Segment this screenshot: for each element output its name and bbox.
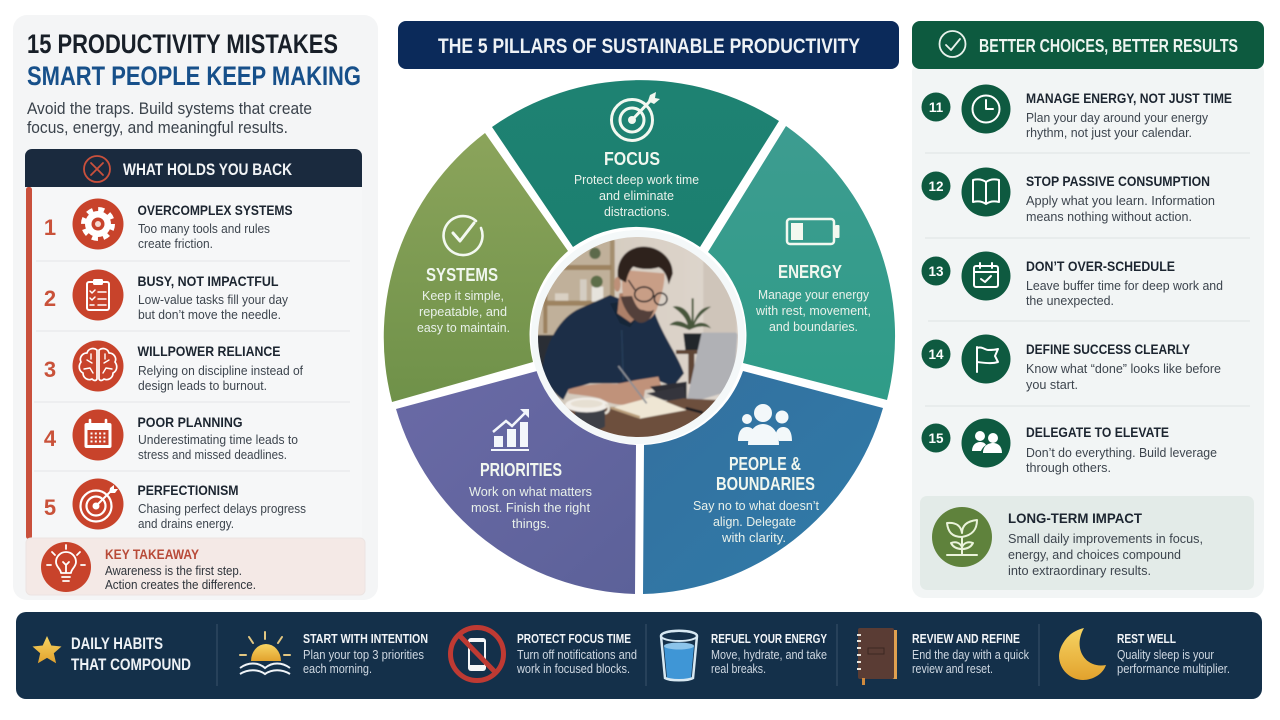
choice 15: DELEGATE TO ELEVATE bbox=[1026, 424, 1169, 440]
habit: rest well: REST WELL bbox=[1117, 632, 1176, 646]
callout: long-term impact bbox=[920, 496, 1254, 590]
choice 13 bbox=[922, 252, 1223, 308]
habit: rest well: performance multiplier. bbox=[1117, 662, 1230, 676]
segment: priorities: Work on what matters bbox=[469, 485, 592, 499]
icon: calendar bbox=[72, 410, 124, 460]
callout: key takeaway: Action creates the difference. bbox=[105, 578, 256, 592]
callout: key takeaway: Awareness is the first step. bbox=[105, 564, 242, 578]
icon: clipboard bbox=[72, 270, 124, 320]
mistake 3 bbox=[44, 340, 303, 393]
icon: flag bbox=[962, 334, 1010, 384]
badge 15 bbox=[922, 424, 950, 452]
badge 15: 15 bbox=[928, 431, 944, 446]
segment: focus: and eliminate bbox=[599, 189, 674, 203]
icon: rising bars bbox=[491, 409, 529, 451]
mistake 4: POOR PLANNING bbox=[138, 414, 243, 430]
segment: people and boundaries bbox=[643, 371, 883, 594]
subtitle: Avoid the traps. Build systems that create bbox=[27, 100, 312, 118]
icon: check circle bbox=[940, 31, 966, 57]
choice 12: means nothing without action. bbox=[1026, 210, 1192, 224]
choice 11: rhythm, not just your calendar. bbox=[1026, 126, 1192, 140]
callout: long-term impact: LONG-TERM IMPACT bbox=[1008, 510, 1142, 526]
segment: energy: Manage your energy bbox=[758, 288, 870, 302]
segment: energy: ENERGY bbox=[778, 262, 842, 282]
segment: focus bbox=[492, 80, 779, 247]
subtitle bbox=[27, 100, 312, 137]
segment: energy: and boundaries. bbox=[769, 320, 858, 334]
mistake 2: 2 bbox=[44, 286, 56, 311]
choice 13: Leave buffer time for deep work and bbox=[1026, 279, 1223, 293]
choice 13: DON’T OVER-SCHEDULE bbox=[1026, 258, 1175, 274]
segment: priorities: PRIORITIES bbox=[480, 460, 562, 480]
mistake 2: Low-value tasks fill your day bbox=[138, 293, 289, 307]
header: what holds you back: WHAT HOLDS YOU BACK bbox=[123, 160, 293, 179]
icon: glass of water bbox=[661, 631, 697, 680]
mistake 4: stress and missed deadlines. bbox=[138, 448, 287, 462]
icon: sunrise bbox=[240, 632, 290, 674]
segment: focus: Protect deep work time bbox=[574, 173, 699, 187]
choice 11 bbox=[922, 84, 1232, 140]
mistake 5 bbox=[44, 478, 306, 531]
list background bbox=[26, 187, 362, 539]
mistake 1: 1 bbox=[44, 215, 56, 240]
mistake 1 bbox=[44, 198, 292, 251]
habits heading: THAT COMPOUND bbox=[71, 656, 191, 674]
choice 15: Don’t do everything. Build leverage bbox=[1026, 446, 1217, 460]
icon: star bbox=[32, 636, 62, 663]
callout: key takeaway: KEY TAKEAWAY bbox=[105, 546, 200, 562]
icon: two people bbox=[962, 418, 1010, 468]
banner: better choices bbox=[912, 21, 1264, 69]
habit: protect focus time: work in focused blocks. bbox=[516, 662, 630, 676]
banner: center heading bbox=[398, 21, 899, 69]
icon: calendar check bbox=[962, 252, 1010, 300]
icon: gear bbox=[72, 198, 124, 250]
habit: refuel your energy: real breaks. bbox=[711, 662, 766, 676]
habit: refuel your energy: REFUEL YOUR ENERGY bbox=[711, 632, 828, 646]
habit: rest well bbox=[1059, 628, 1230, 680]
mistake 1: create friction. bbox=[138, 237, 213, 251]
choice 12 bbox=[922, 168, 1215, 224]
mistake 3: design leads to burnout. bbox=[138, 379, 267, 393]
mistake 4 bbox=[44, 410, 298, 462]
mistake 3: WILLPOWER RELIANCE bbox=[138, 343, 280, 359]
choice 12: STOP PASSIVE CONSUMPTION bbox=[1026, 173, 1210, 189]
mistake 2 bbox=[44, 270, 289, 322]
segment: priorities: most. Finish the right bbox=[471, 501, 591, 515]
segment: systems: Keep it simple, bbox=[422, 289, 504, 303]
icon: moon bbox=[1059, 628, 1106, 680]
title bbox=[27, 29, 361, 91]
title: SMART PEOPLE KEEP MAKING bbox=[27, 61, 361, 91]
mistake 5: and drains energy. bbox=[138, 517, 234, 531]
mistake 2: BUSY, NOT IMPACTFUL bbox=[138, 273, 279, 289]
icon: x circle bbox=[84, 156, 110, 182]
icon: people group bbox=[738, 404, 792, 445]
habit: refuel your energy: Move, hydrate, and take bbox=[711, 648, 827, 662]
choice 11: Plan your day around your energy bbox=[1026, 111, 1209, 125]
choice 14: you start. bbox=[1026, 378, 1078, 392]
habit: start with intention bbox=[240, 632, 428, 676]
icon: notebook bbox=[857, 628, 897, 685]
mistake 1: OVERCOMPLEX SYSTEMS bbox=[138, 202, 292, 218]
badge 11: 11 bbox=[929, 100, 944, 115]
badge 13: 13 bbox=[928, 264, 944, 279]
mistake 3: 3 bbox=[44, 357, 56, 382]
segment: people and boundaries: BOUNDARIES bbox=[716, 474, 815, 494]
segment: energy: with rest, movement, bbox=[755, 304, 871, 318]
subtitle: focus, energy, and meaningful results. bbox=[27, 119, 288, 137]
segment: systems: repeatable, and bbox=[419, 305, 507, 319]
callout: long-term impact: Small daily improvements in focus, bbox=[1008, 532, 1203, 546]
mistake 1: Too many tools and rules bbox=[138, 222, 270, 236]
choice 14: Know what “done” looks like before bbox=[1026, 362, 1221, 376]
accent bar bbox=[26, 187, 32, 539]
panel: left mistakes bbox=[13, 15, 378, 600]
callout: long-term impact: energy, and choices compound bbox=[1008, 548, 1181, 562]
habits heading bbox=[32, 635, 191, 674]
header: what holds you back bbox=[25, 149, 362, 187]
mistake 4: 4 bbox=[44, 426, 57, 451]
icon: sprout bbox=[932, 507, 992, 567]
choice 12: Apply what you learn. Information bbox=[1026, 194, 1215, 208]
segment: people and boundaries: PEOPLE & bbox=[729, 454, 801, 474]
choice 14: DEFINE SUCCESS CLEARLY bbox=[1026, 341, 1191, 357]
segment: systems: SYSTEMS bbox=[426, 265, 498, 285]
choice 14 bbox=[922, 334, 1221, 392]
icon: brain bbox=[72, 340, 124, 392]
mistake 3: Relying on discipline instead of bbox=[138, 364, 303, 378]
habit: rest well: Quality sleep is your bbox=[1117, 648, 1214, 662]
icon: battery bbox=[787, 219, 840, 244]
segment: priorities: things. bbox=[512, 517, 550, 531]
choice 13: the unexpected. bbox=[1026, 294, 1114, 308]
habit: start with intention: each morning. bbox=[303, 662, 372, 676]
segment: focus: FOCUS bbox=[604, 149, 660, 169]
segment: priorities bbox=[396, 371, 636, 594]
title: 15 PRODUCTIVITY MISTAKES bbox=[27, 29, 338, 59]
panel: daily habits bar bbox=[16, 612, 1262, 699]
habit: protect focus time: Turn off notifications and bbox=[517, 648, 637, 662]
segment: people and boundaries: align. Delegate bbox=[713, 515, 796, 529]
icon: light bulb bbox=[41, 542, 91, 592]
habit: review and refine: review and reset. bbox=[912, 662, 993, 676]
habit: review and refine: REVIEW AND REFINE bbox=[912, 632, 1020, 646]
icon: check circle bbox=[444, 216, 483, 255]
badge 14 bbox=[922, 340, 950, 368]
segment: systems: easy to maintain. bbox=[417, 321, 510, 335]
choice 15: through others. bbox=[1026, 461, 1111, 475]
segment: energy bbox=[708, 126, 895, 400]
habit: refuel your energy bbox=[661, 631, 828, 680]
segment: people and boundaries: with clarity. bbox=[721, 531, 786, 545]
badge 14: 14 bbox=[928, 347, 944, 362]
chart: pillars wheel bbox=[384, 80, 895, 594]
icon: target bbox=[612, 92, 660, 140]
mistake 4: Underestimating time leads to bbox=[138, 433, 298, 447]
choice 15 bbox=[922, 418, 1217, 475]
choice 11: MANAGE ENERGY, NOT JUST TIME bbox=[1026, 90, 1232, 106]
banner: center heading: THE 5 PILLARS OF SUSTAINABLE PRODUCTIVITY bbox=[438, 35, 860, 58]
mistake 5: PERFECTIONISM bbox=[138, 482, 238, 498]
icon: no phone bbox=[450, 628, 504, 680]
callout: long-term impact: into extraordinary results. bbox=[1008, 564, 1151, 578]
badge 13 bbox=[922, 256, 950, 286]
habit: review and refine: End the day with a quick bbox=[912, 648, 1030, 662]
panel: right choices bbox=[912, 21, 1264, 598]
habit: protect focus time bbox=[450, 628, 637, 680]
habits heading: DAILY HABITS bbox=[71, 635, 163, 653]
photo: man writing at desk bbox=[530, 230, 750, 444]
segment: people and boundaries: Say no to what doesn’t bbox=[693, 499, 820, 513]
mistake 5: 5 bbox=[44, 495, 56, 520]
habit: start with intention: Plan your top 3 priorities bbox=[303, 648, 424, 662]
mistake 5: Chasing perfect delays progress bbox=[138, 502, 306, 516]
badge 12 bbox=[922, 172, 950, 200]
habit: review and refine bbox=[857, 628, 1030, 685]
badge 12: 12 bbox=[928, 179, 944, 194]
icon: target bbox=[72, 478, 124, 530]
habit: protect focus time: PROTECT FOCUS TIME bbox=[517, 632, 631, 646]
icon: open book bbox=[962, 168, 1010, 216]
badge 11 bbox=[922, 92, 950, 122]
segment: focus: distractions. bbox=[604, 205, 670, 219]
callout: key takeaway bbox=[26, 538, 365, 595]
segment: systems bbox=[384, 133, 568, 402]
mistake 2: but don’t move the needle. bbox=[138, 308, 281, 322]
icon: clock bbox=[962, 84, 1010, 134]
habit: start with intention: START WITH INTENTION bbox=[303, 632, 428, 646]
